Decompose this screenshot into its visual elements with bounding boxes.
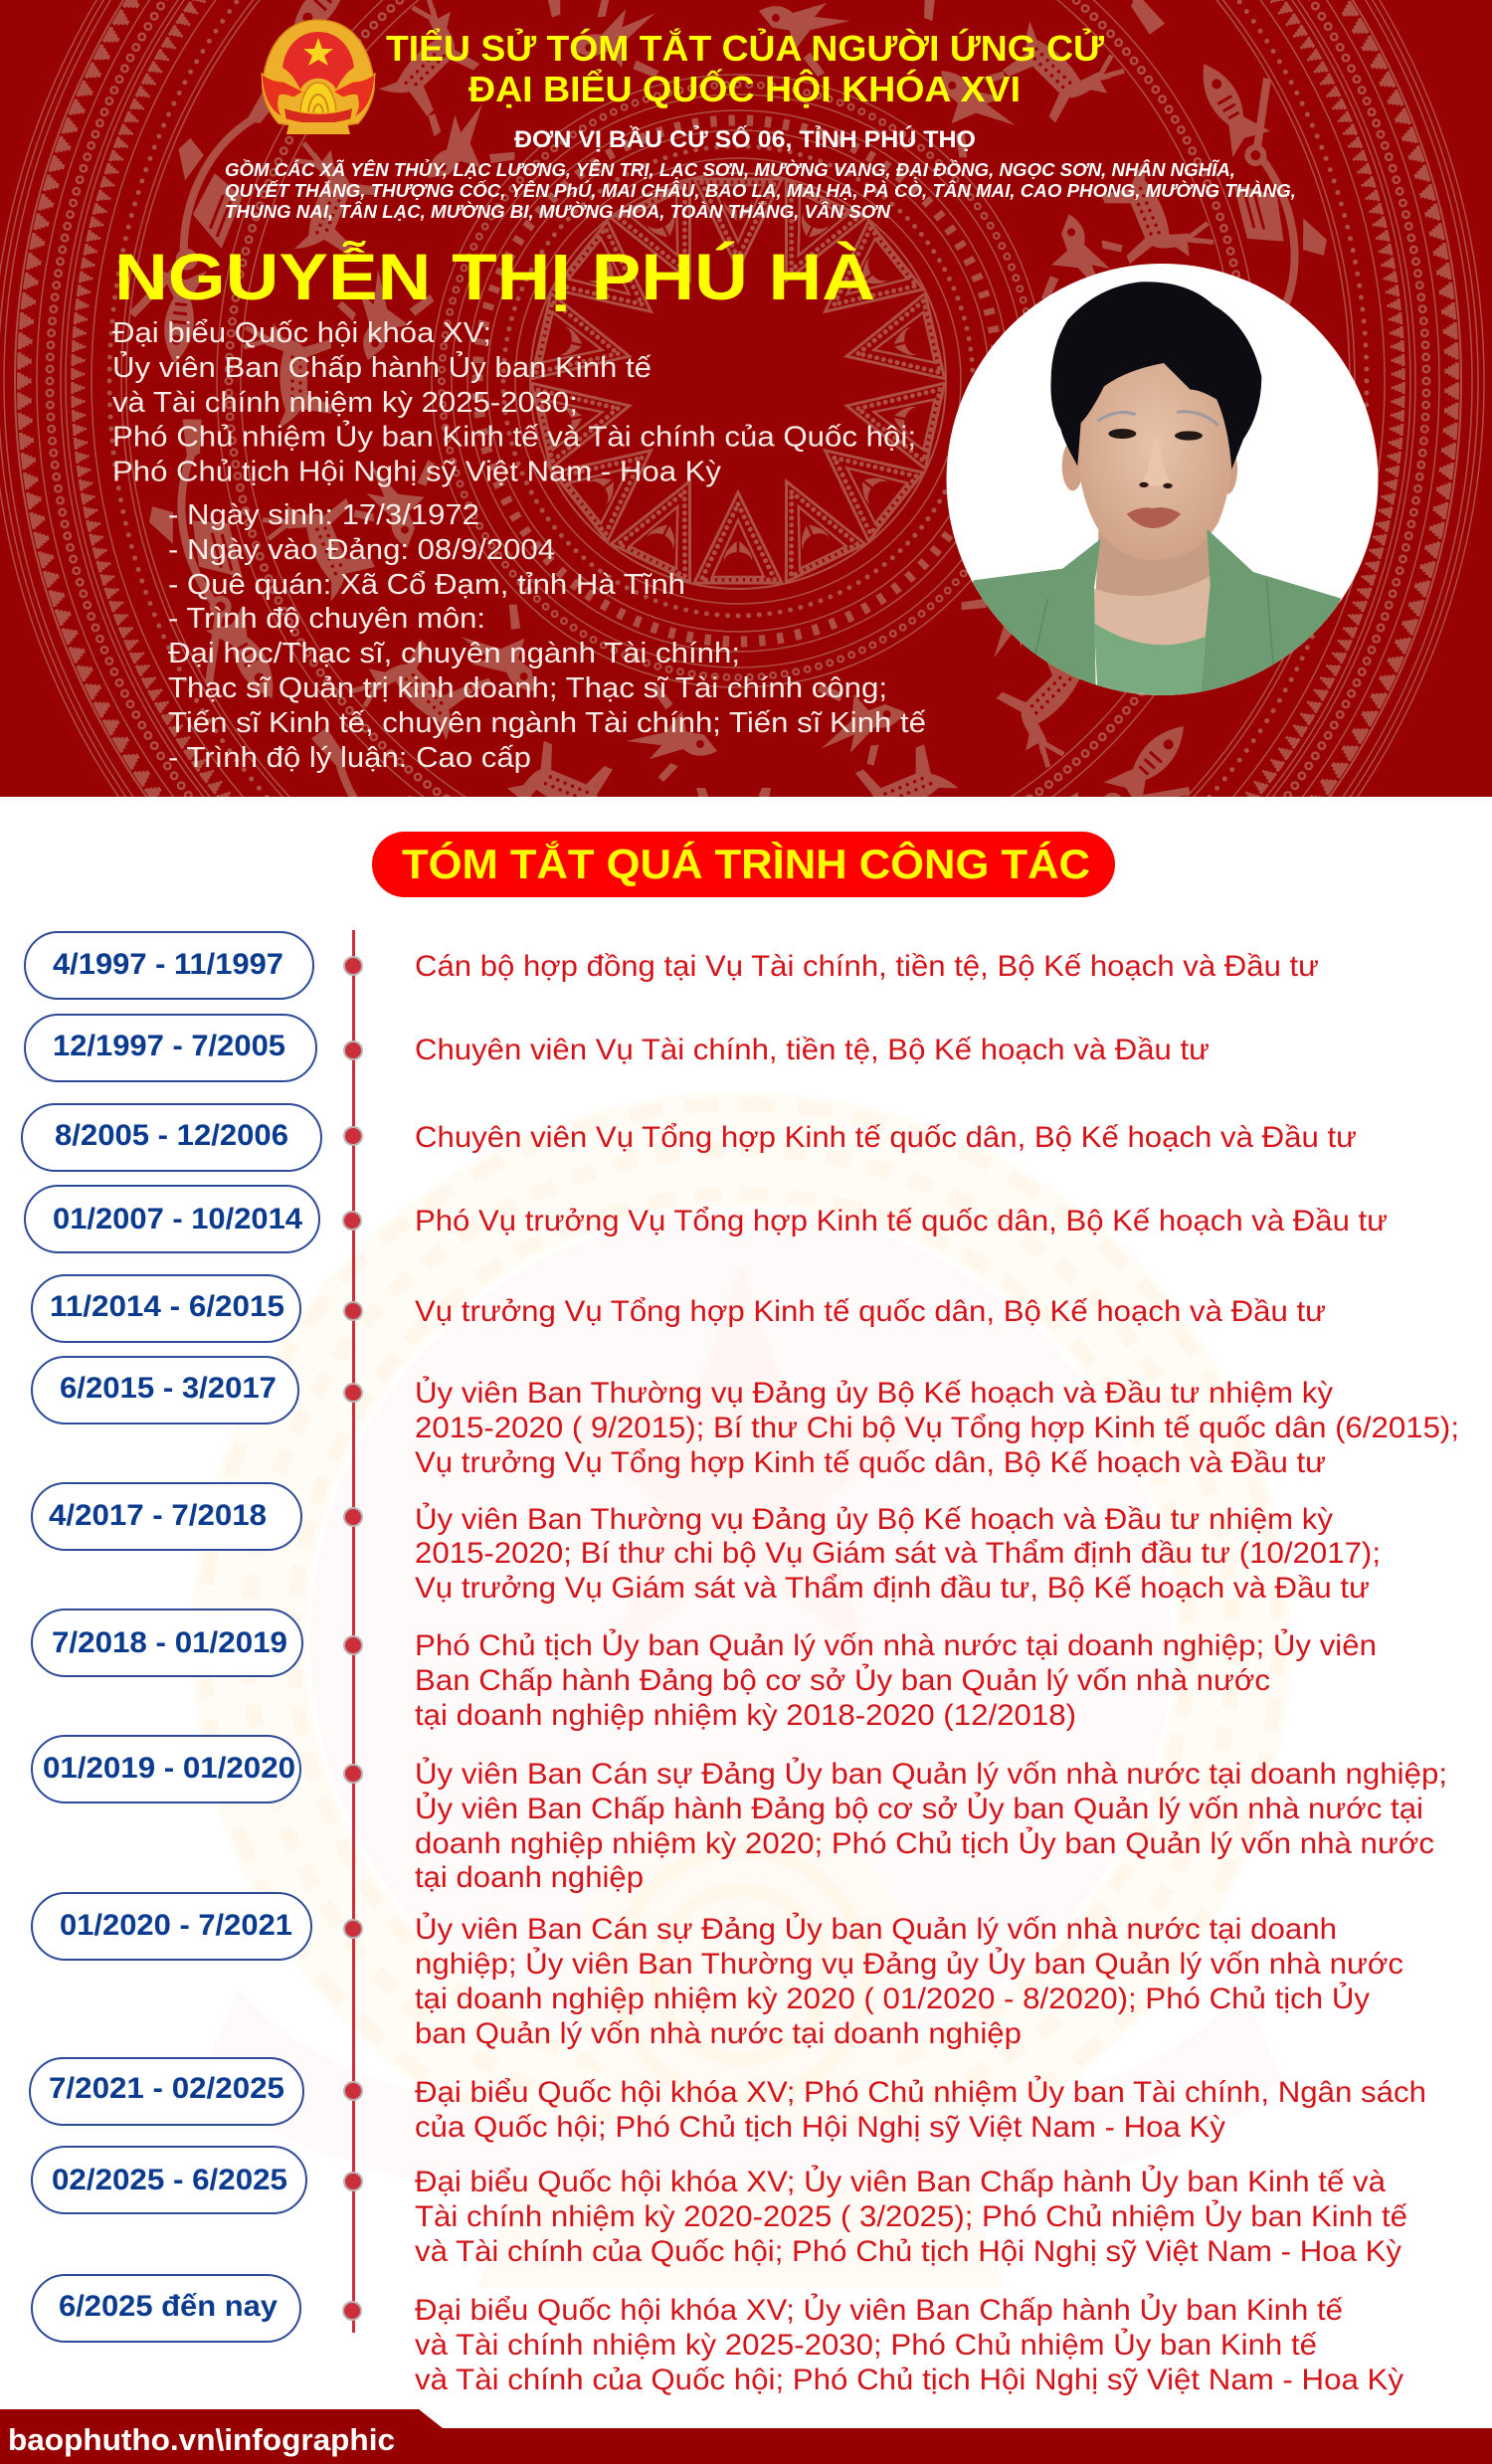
entry: 01/2020 - 7/2021: 01/2020 - 7/2021 — [60, 1909, 292, 1942]
entry: 01/2019 - 01/2020 — [32, 1736, 1447, 1894]
timeline axis — [352, 930, 355, 2333]
entry: 7/2018 - 01/2019: 7/2018 - 01/2019 — [52, 1626, 287, 1659]
entry: 4/2017 - 7/2018: 4/2017 - 7/2018 — [49, 1499, 267, 1532]
personal details: - Ngày vào Đảng: 08/9/2004 — [168, 534, 555, 566]
entry: 02/2025 - 6/2025: Tài chính nhiệm kỳ 2020-2025 ( 3/2025); Phó Chủ nhiệm Ủy ban Kinh tế — [415, 2199, 1407, 2233]
portrait photo — [947, 264, 1379, 718]
current positions: Phó Chủ tịch Hội Nghị sỹ Việt Nam - Hoa Kỳ — [112, 456, 722, 487]
entry: 12/1997 - 7/2005: Chuyên viên Vụ Tài chính, tiền tệ, Bộ Kế hoạch và Đầu tư — [415, 1034, 1210, 1066]
icon: national emblem — [262, 20, 375, 134]
entry: 7/2021 - 02/2025 — [30, 2058, 1426, 2144]
entry: 01/2019 - 01/2020: Ủy viên Ban Cán sự Đảng Ủy ban Quản lý vốn nhà nước tại doanh nghiệp; — [415, 1757, 1447, 1791]
footer bar: baophutho.vn\infographic — [8, 2422, 395, 2457]
entry: 02/2025 - 6/2025: và Tài chính của Quốc hội; Phó Chủ tịch Hội Nghị sỹ Việt Nam - Hoa Kỳ — [415, 2235, 1401, 2268]
entry: 01/2020 - 7/2021: Ủy viên Ban Cán sự Đảng Ủy ban Quản lý vốn nhà nước tại doanh — [415, 1912, 1337, 1946]
personal details: - Trình độ chuyên môn: — [168, 603, 485, 635]
entry: 7/2018 - 01/2019 — [32, 1610, 1377, 1732]
entry: 8/2005 - 12/2006: 8/2005 - 12/2006 — [55, 1119, 288, 1152]
personal details: Tiến sĩ Kinh tế, chuyên ngành Tài chính; Tiến sĩ Kinh tế — [168, 707, 926, 739]
entry: 4/2017 - 7/2018: Vụ trưởng Vụ Giám sát và Thẩm định đầu tư, Bộ Kế hoạch và Đầu tư — [415, 1572, 1370, 1605]
entry: 6/2015 - 3/2017: 2015-2020 ( 9/2015); Bí thư Chi bộ Vụ Tổng hợp Kinh tế quốc dân (6/2015); — [415, 1412, 1459, 1444]
entry: 02/2025 - 6/2025: 02/2025 - 6/2025 — [52, 2164, 287, 2196]
entry: 01/2020 - 7/2021: nghiệp; Ủy viên Ban Thường vụ Đảng ủy Ủy ban Quản lý vốn nhà nước — [415, 1947, 1403, 1981]
entry: 7/2021 - 02/2025: Đại biểu Quốc hội khóa XV; Phó Chủ nhiệm Ủy ban Tài chính, Ngân sách — [415, 2075, 1426, 2109]
entry: 11/2014 - 6/2015 — [32, 1275, 1326, 1342]
commune list — [225, 159, 1296, 222]
entry: 6/2015 - 3/2017: Vụ trưởng Vụ Tổng hợp Kinh tế quốc dân, Bộ Kế hoạch và Đầu tư — [415, 1446, 1326, 1479]
current positions: Đại biểu Quốc hội khóa XV; — [112, 317, 491, 349]
entry: 7/2018 - 01/2019: Phó Chủ tịch Ủy ban Quản lý vốn nhà nước tại doanh nghiệp; Ủy viên — [415, 1628, 1377, 1662]
entry: 4/1997 - 11/1997: Cán bộ hợp đồng tại Vụ Tài chính, tiền tệ, Bộ Kế hoạch và Đầu tư — [415, 950, 1319, 983]
title: ĐẠI BIỂU QUỐC HỘI KHÓA XVI — [468, 68, 1021, 109]
entry: 7/2021 - 02/2025: của Quốc hội; Phó Chủ tịch Hội Nghị sỹ Việt Nam - Hoa Kỳ — [415, 2111, 1225, 2144]
entry: 01/2020 - 7/2021: ban Quản lý vốn nhà nước tại doanh nghiệp — [415, 2017, 1022, 2050]
section heading: TÓM TẮT QUÁ TRÌNH CÔNG TÁC — [402, 840, 1090, 887]
personal details: - Trình độ lý luận: Cao cấp — [168, 742, 531, 774]
entry: 01/2020 - 7/2021 — [32, 1893, 1403, 2050]
current positions: và Tài chính nhiệm kỳ 2025-2030; — [112, 387, 578, 419]
entry: 12/1997 - 7/2005: 12/1997 - 7/2005 — [53, 1030, 285, 1062]
entry: 8/2005 - 12/2006 — [22, 1104, 1357, 1171]
entry: 02/2025 - 6/2025: Đại biểu Quốc hội khóa XV; Ủy viên Ban Chấp hành Ủy ban Kinh tế và — [415, 2165, 1386, 2198]
entry: 01/2007 - 10/2014: Phó Vụ trưởng Vụ Tổng hợp Kinh tế quốc dân, Bộ Kế hoạch và Đầu tư — [415, 1205, 1388, 1237]
personal details — [168, 499, 926, 774]
electoral unit heading: ĐƠN VỊ BẦU CỬ SỐ 06, TỈNH PHÚ THỌ — [514, 124, 976, 153]
section heading — [372, 832, 1115, 897]
entry: 6/2015 - 3/2017: Ủy viên Ban Thường vụ Đảng ủy Bộ Kế hoạch và Đầu tư nhiệm kỳ — [415, 1376, 1333, 1410]
entry: 4/2017 - 7/2018: 2015-2020; Bí thư chi bộ Vụ Giám sát và Thẩm định đầu tư (10/2017); — [415, 1537, 1381, 1570]
current positions — [112, 317, 916, 487]
entry: 4/2017 - 7/2018 — [32, 1483, 1381, 1605]
entry: 01/2007 - 10/2014 — [25, 1186, 1388, 1252]
entry: 01/2019 - 01/2020: Ủy viên Ban Chấp hành Đảng bộ cơ sở Ủy ban Quản lý vốn nhà nước tại — [415, 1792, 1423, 1825]
entry: 4/1997 - 11/1997 — [25, 932, 1319, 999]
entry: 6/2025 đến nay: và Tài chính của Quốc hội; Phó Chủ tịch Hội Nghị sỹ Việt Nam - Hoa Kỳ — [415, 2364, 1403, 2396]
title — [386, 27, 1104, 109]
background drum pattern — [0, 0, 1485, 797]
entry: 4/1997 - 11/1997: 4/1997 - 11/1997 — [53, 948, 283, 981]
watermark: faded national emblem — [199, 1104, 1283, 2288]
personal details: Đại học/Thạc sĩ, chuyên ngành Tài chính; — [168, 638, 740, 669]
entry: 01/2020 - 7/2021: tại doanh nghiệp nhiệm kỳ 2020 ( 01/2020 - 8/2020); Phó Chủ tịch Ủy — [415, 1982, 1370, 2015]
entry: 4/2017 - 7/2018: Ủy viên Ban Thường vụ Đảng ủy Bộ Kế hoạch và Đầu tư nhiệm kỳ — [415, 1502, 1333, 1536]
footer bar — [0, 2409, 1492, 2464]
personal details: Thạc sĩ Quản trị kinh doanh; Thạc sĩ Tài chính công; — [168, 672, 887, 704]
entry: 11/2014 - 6/2015: 11/2014 - 6/2015 — [50, 1290, 284, 1323]
header panel — [0, 0, 1492, 797]
title: TIỂU SỬ TÓM TẮT CỦA NGƯỜI ỨNG CỬ — [386, 27, 1104, 69]
entry: 11/2014 - 6/2015: Vụ trưởng Vụ Tổng hợp Kinh tế quốc dân, Bộ Kế hoạch và Đầu tư — [415, 1295, 1326, 1328]
current positions: Ủy viên Ban Chấp hành Ủy ban Kinh tế — [112, 350, 652, 384]
entry: 6/2025 đến nay: 6/2025 đến nay — [59, 2290, 278, 2323]
candidate name: NGUYỄN THỊ PHÚ HÀ — [114, 240, 875, 313]
entry: 6/2025 đến nay: Đại biểu Quốc hội khóa XV; Ủy viên Ban Chấp hành Ủy ban Kinh tế — [415, 2293, 1343, 2327]
entry: 8/2005 - 12/2006: Chuyên viên Vụ Tổng hợp Kinh tế quốc dân, Bộ Kế hoạch và Đầu tư — [415, 1121, 1357, 1154]
commune list: GỒM CÁC XÃ YÊN THỦY, LẠC LƯƠNG, YÊN TRỊ, LẠC SƠN, MƯỜNG VANG, ĐẠI ĐỒNG, NGỌC SƠN, NHÂN NGHĨA, — [225, 159, 1235, 180]
entry: 6/2015 - 3/2017: 6/2015 - 3/2017 — [60, 1372, 277, 1405]
current positions: Phó Chủ nhiệm Ủy ban Kinh tế và Tài chính của Quốc hội; — [112, 420, 916, 454]
entry: 01/2019 - 01/2020: 01/2019 - 01/2020 — [43, 1752, 295, 1785]
commune list: QUYẾT THẮNG, THƯỢNG CỐC, YÊN PhÚ, MAI CHÂU, BAO LA, MAI HẠ, PÀ CÒ, TÂN MAI, CAO PHONG, MƯỜNG THÀNG, — [225, 180, 1296, 201]
entry: 6/2025 đến nay: và Tài chính nhiệm kỳ 2025-2030; Phó Chủ nhiệm Ủy ban Kinh tế — [415, 2328, 1317, 2362]
commune list: THUNG NAI, TÂN LẠC, MƯỜNG BI, MƯỜNG HOA, TOÀN THẮNG, VÂN SƠN — [225, 201, 891, 222]
entry: 12/1997 - 7/2005 — [25, 1015, 1210, 1081]
entry: 7/2018 - 01/2019: tại doanh nghiệp nhiệm kỳ 2018-2020 (12/2018) — [415, 1699, 1076, 1732]
entry: 01/2007 - 10/2014: 01/2007 - 10/2014 — [53, 1203, 302, 1235]
entry: 01/2019 - 01/2020: doanh nghiệp nhiệm kỳ 2020; Phó Chủ tịch Ủy ban Quản lý vốn nhà nước — [415, 1826, 1434, 1860]
personal details: - Quê quán: Xã Cổ Đạm, tỉnh Hà Tĩnh — [168, 569, 685, 601]
personal details: - Ngày sinh: 17/3/1972 — [168, 499, 479, 531]
entry: 02/2025 - 6/2025 — [32, 2147, 1407, 2268]
entry: 7/2021 - 02/2025: 7/2021 - 02/2025 — [49, 2072, 284, 2105]
entry: 6/2025 đến nay — [32, 2275, 1403, 2396]
entry: 01/2019 - 01/2020: tại doanh nghiệp — [415, 1861, 644, 1894]
entry: 7/2018 - 01/2019: Ban Chấp hành Đảng bộ cơ sở Ủy ban Quản lý vốn nhà nước — [415, 1663, 1270, 1697]
entry: 6/2015 - 3/2017 — [32, 1357, 1459, 1479]
